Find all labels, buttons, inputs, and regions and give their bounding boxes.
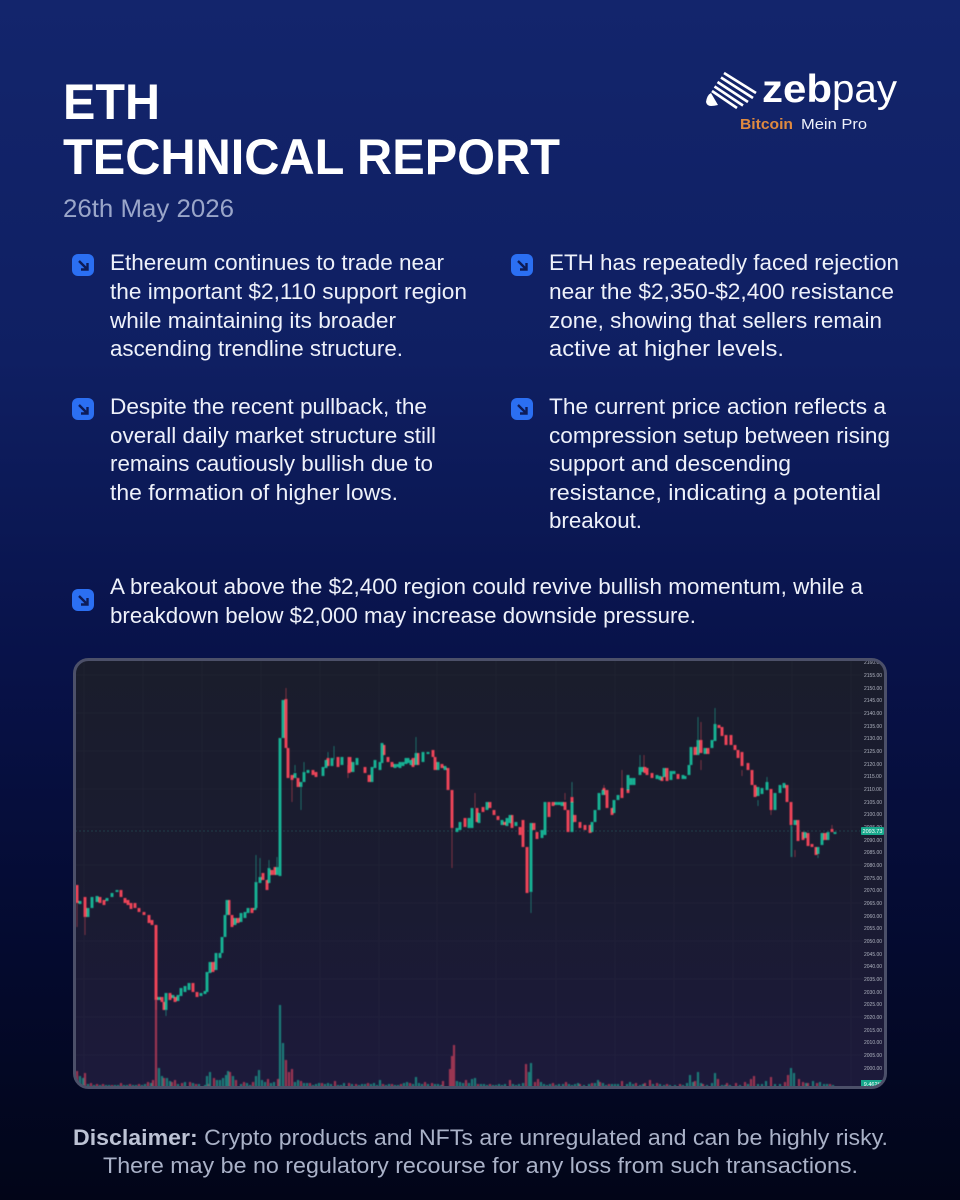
bullet: breakout levels (72, 574, 863, 628)
bullet: compression setup: compression setup between rising (549, 423, 890, 448)
price axis: 2090.00 (864, 838, 882, 844)
price axis: 2005.00 (864, 1053, 882, 1059)
disclaimer (73, 1125, 888, 1178)
price axis: 2075.00 (864, 876, 882, 882)
title: TECHNICAL REPORT (63, 129, 560, 185)
bullet: compression setup: breakout. (549, 508, 642, 533)
price axis: 2140.00 (864, 711, 882, 717)
volume tag (861, 1080, 882, 1086)
price axis: 2095.00 (864, 825, 882, 831)
logo (706, 68, 898, 133)
price axis: 2010.00 (864, 1040, 882, 1046)
wordmark: zeb (762, 68, 832, 111)
bullet: support region: the important $2,110 support region (110, 279, 467, 304)
bullet: resistance rejection: zone, showing that sellers remain (549, 308, 882, 333)
price axis: 2015.00 (864, 1028, 882, 1034)
bullet: resistance rejection (511, 250, 899, 361)
bullet: breakout levels: breakdown below $2,000 may increase downside pressure. (110, 603, 696, 628)
bullet: resistance rejection: ETH has repeatedly faced rejection (549, 250, 899, 275)
price axis: 2020.00 (864, 1015, 882, 1021)
bullet: compression setup: resistance, indicating a potential (549, 480, 881, 505)
bullet: market structure: Despite the recent pullback, the (110, 394, 427, 419)
price axis (864, 660, 882, 1072)
bullet: market structure: overall daily market structure still (110, 423, 436, 448)
bullet: resistance rejection: near the $2,350-$2,400 resistance (549, 279, 894, 304)
bullet: compression setup (511, 394, 890, 533)
logo: Mein Pro (801, 116, 867, 133)
price axis: 2135.00 (864, 724, 882, 730)
price axis: 2000.00 (864, 1066, 882, 1072)
bullet: support region: Ethereum continues to trade near (110, 250, 445, 275)
candle bodies (77, 699, 835, 1010)
price axis: 2155.00 (864, 673, 882, 679)
date: 26th May 2026 (63, 195, 234, 223)
volume tag: 9.462K (864, 1082, 882, 1088)
price axis: 2025.00 (864, 1002, 882, 1008)
price axis: 2035.00 (864, 977, 882, 983)
disclaimer: There may be no regulatory recourse for any loss from such transactions. (103, 1153, 858, 1178)
price axis: 2045.00 (864, 952, 882, 958)
bullet: breakout levels: A breakout above the $2,400 region could revive bullish momentum, while a (110, 574, 863, 599)
candlestick chart panel (74, 660, 886, 1088)
price axis: 2150.00 (864, 686, 882, 692)
price axis: 2055.00 (864, 926, 882, 932)
price axis: 2085.00 (864, 850, 882, 856)
candle wicks (77, 688, 832, 1016)
price axis: 2060.00 (864, 914, 882, 920)
bullet: compression setup: support and descending (549, 451, 791, 476)
current price tag: 2093.73 (863, 829, 882, 835)
bullet: market structure (72, 394, 436, 505)
price axis: 2145.00 (864, 698, 882, 704)
bullet: market structure: the formation of higher lows. (110, 480, 398, 505)
bullet: support region (72, 250, 467, 361)
price axis: 2105.00 (864, 800, 882, 806)
price axis: 2040.00 (864, 964, 882, 970)
price axis: 2100.00 (864, 812, 882, 818)
disclaimer: Disclaimer: Crypto products and NFTs are unregulated and can be highly risky. (73, 1125, 888, 1150)
bullet: compression setup: The current price action reflects a (549, 394, 886, 419)
price axis: 2065.00 (864, 901, 882, 907)
price axis: 2110.00 (864, 787, 882, 793)
bullet: resistance rejection: active at higher levels. (549, 336, 784, 361)
title (63, 74, 560, 185)
volume bars (77, 1000, 833, 1087)
logo: pay (832, 68, 898, 111)
price axis: 2130.00 (864, 736, 882, 742)
tagline: Bitcoin (740, 116, 793, 133)
price axis: 2030.00 (864, 990, 882, 996)
current price tag (861, 827, 884, 835)
title: ETH (63, 74, 160, 130)
bullet: market structure: remains cautiously bullish due to (110, 451, 433, 476)
price axis: 2115.00 (864, 774, 882, 780)
price axis: 2070.00 (864, 888, 882, 894)
bullet: support region: ascending trendline structure. (110, 336, 403, 361)
price axis: 2120.00 (864, 762, 882, 768)
icon: zebpay stripes (706, 73, 756, 108)
price axis: 2050.00 (864, 939, 882, 945)
bullet: support region: while maintaining its broader (109, 308, 397, 333)
price axis: 2160.00 (864, 660, 882, 666)
price axis: 2125.00 (864, 749, 882, 755)
price axis: 2080.00 (864, 863, 882, 869)
